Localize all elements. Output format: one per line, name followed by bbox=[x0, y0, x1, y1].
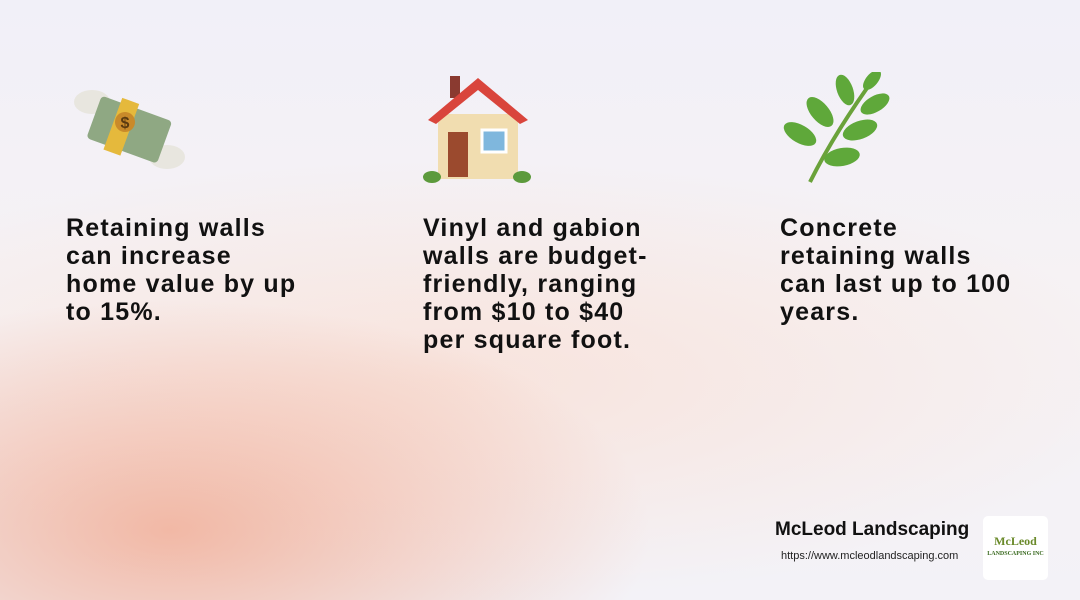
text: concrete: Concrete bbox=[780, 214, 898, 242]
text: home value: to 15%. bbox=[66, 298, 162, 326]
logo: LANDSCAPING INC bbox=[987, 551, 1044, 557]
text: vinyl and gabion: from $10 to $40 bbox=[423, 298, 624, 326]
text: vinyl and gabion: walls are budget- bbox=[423, 242, 648, 270]
brand url: https://www.mcleodlandscaping.com bbox=[781, 550, 958, 562]
logo: McLeod bbox=[994, 534, 1037, 548]
icon: herb bbox=[784, 72, 890, 183]
text: home value: home value by up bbox=[66, 270, 296, 298]
icon: money with wings bbox=[74, 90, 185, 169]
text: home value: Retaining walls bbox=[66, 214, 266, 242]
logo bbox=[983, 516, 1048, 580]
text: vinyl and gabion: friendly, ranging bbox=[423, 270, 637, 298]
text: vinyl and gabion: Vinyl and gabion bbox=[423, 214, 642, 242]
text: concrete: retaining walls bbox=[780, 242, 972, 270]
text: concrete: can last up to 100 bbox=[780, 270, 1011, 298]
text: home value bbox=[66, 214, 296, 326]
brand name: McLeod Landscaping bbox=[775, 519, 969, 540]
text: concrete bbox=[780, 214, 1011, 326]
icon: house bbox=[423, 76, 531, 183]
text: vinyl and gabion: per square foot. bbox=[423, 326, 631, 354]
icon: money with wings: $ bbox=[121, 115, 130, 132]
text: concrete: years. bbox=[780, 298, 860, 326]
text: vinyl and gabion bbox=[423, 214, 648, 354]
text: home value: can increase bbox=[66, 242, 232, 270]
